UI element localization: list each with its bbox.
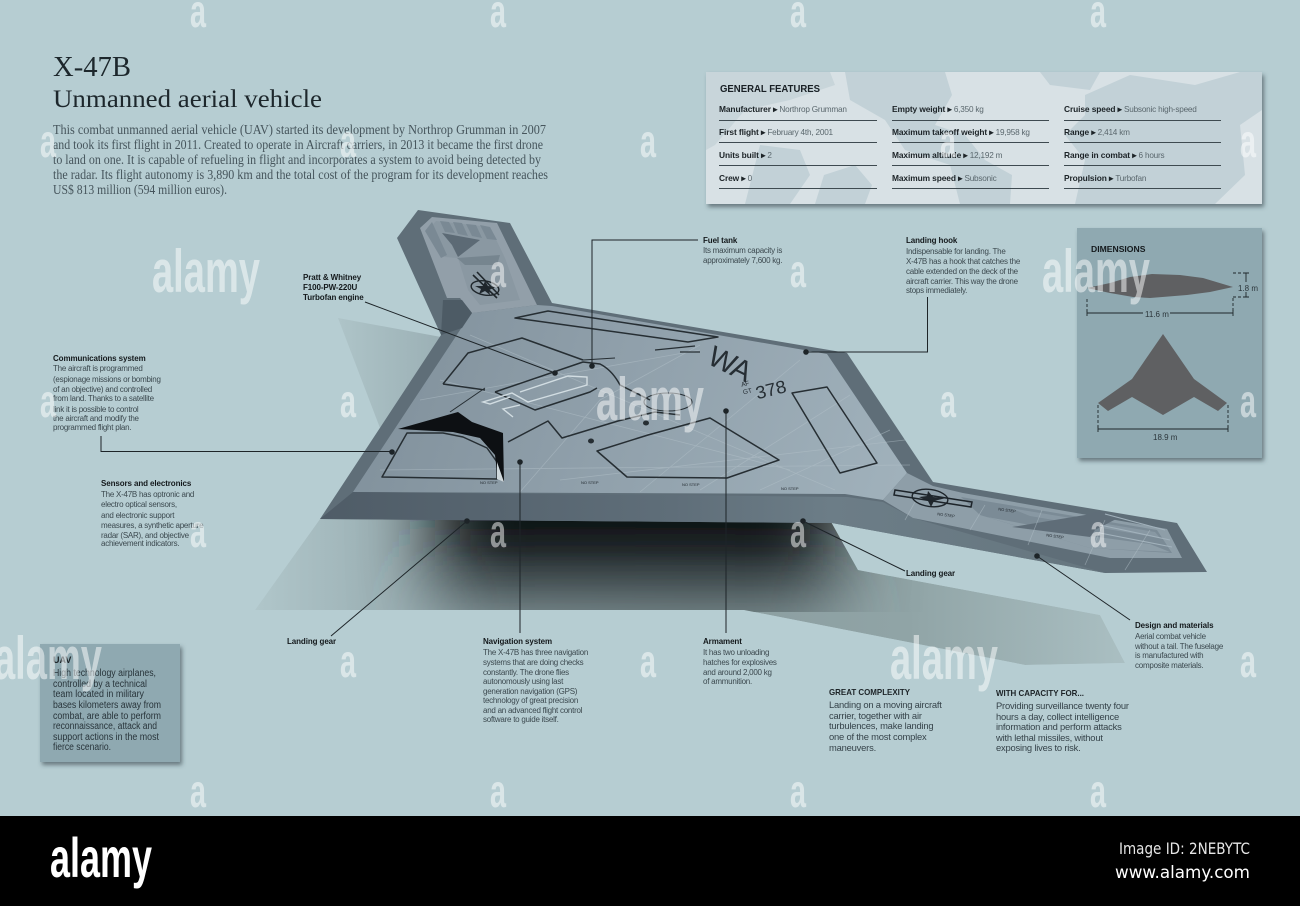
callout: communications system: The aircraft is programmed — [53, 364, 143, 373]
callout: communications system: from land. Thanks to a satellite — [53, 394, 155, 403]
aircraft upper surface — [353, 305, 907, 500]
features column 1: Manufacturer ▸ Northrop Grumman — [719, 104, 847, 114]
watermarks: a — [1240, 635, 1256, 687]
callout: communications system: Communications system — [53, 354, 146, 363]
watermarks: alamy — [152, 238, 260, 305]
dimension labels: 18.9 m — [1153, 433, 1178, 442]
leader: armament — [723, 408, 729, 633]
stencil NO STEP texts: NO STEP — [781, 486, 799, 491]
panel: UAV: High technology airplanes, — [53, 668, 156, 679]
callout: fuel tank: Its maximum capacity is — [703, 246, 782, 255]
callout: armament: Armament — [703, 637, 742, 646]
text block: great complexity: carrier, together with air — [829, 710, 922, 721]
leader: fuel tank — [589, 240, 698, 369]
intro text block: the radar. Its flight autonomy is 3,890 km and the total cost of the program for its development reaches — [53, 167, 548, 182]
callout: communications system: the aircraft and modify the — [53, 414, 140, 423]
panel: dimensions — [1077, 228, 1262, 458]
title — [53, 52, 322, 113]
stencil NO STEP texts: NO STEP — [581, 480, 599, 485]
text block: great complexity: one of the most complex — [829, 731, 927, 742]
callout: navigation system: generation navigation (GPS) — [483, 687, 578, 696]
watermarks: a — [40, 115, 56, 167]
watermarks: a — [490, 765, 506, 817]
callout: armament: of ammunition. — [703, 677, 752, 686]
text block: great complexity: turbulences, make landing — [829, 720, 933, 731]
front top silhouette — [1098, 334, 1227, 415]
panel: UAV: support actions in the most — [53, 732, 159, 743]
aircraft body outline — [320, 210, 1207, 573]
callout: engine: F100-PW-220U — [303, 283, 358, 292]
watermarks: a — [1090, 765, 1106, 817]
tail markings WA 378: GT — [742, 387, 753, 396]
callout: landing hook: Indispensable for landing. The — [906, 247, 1006, 256]
watermarks: a — [1240, 375, 1256, 427]
subtitle: Unmanned aerial vehicle — [53, 86, 322, 113]
callout: navigation system: Navigation system — [483, 637, 552, 646]
callout: landing hook: Landing hook — [906, 236, 958, 245]
watermarks: a — [790, 765, 806, 817]
callout: sensors and electronics: achievement indicators. — [101, 539, 179, 548]
watermarks: a — [940, 115, 956, 167]
callout: engine — [303, 273, 364, 302]
features column 3 — [1064, 104, 1221, 188]
dimension labels: 11.6 m — [1145, 310, 1169, 319]
intro text block: to land on one. It is capable of refueling in flight and incorporates a system to avoid being detected by — [53, 152, 541, 167]
callout: navigation system: constantly. The drone flies — [483, 668, 569, 677]
wing dark blob — [441, 300, 472, 335]
watermarks: a — [940, 375, 956, 427]
callout: fuel tank: Fuel tank — [703, 236, 738, 245]
callout: sensors and electronics: radar (SAR), and objective — [101, 531, 190, 540]
side view silhouette — [1087, 274, 1233, 298]
stencil NO STEP texts: NO STEP — [937, 511, 955, 519]
text block: with capacity for: exposing lives to risk. — [996, 742, 1080, 753]
watermarks: a — [1240, 115, 1256, 167]
callout: landing hook: cable extended on the deck of the — [906, 267, 1019, 276]
watermarks: alamy — [1042, 238, 1150, 305]
features column 2 — [892, 104, 1049, 188]
watermarks: a — [1090, 505, 1106, 557]
callout: communications system: of an objective) and controlled — [53, 385, 152, 394]
features column 1: First flight ▸ February 4th, 2001 — [719, 127, 834, 137]
leader: navigation system — [517, 459, 523, 633]
panel: UAV: bases kilometers away from — [53, 700, 161, 711]
callout: communications system: programmed flight plan. — [53, 423, 131, 432]
features column 3: Range ▸ 2,414 km — [1064, 127, 1130, 137]
callout: design and materials: is manufactured with — [1135, 651, 1203, 660]
callout: fuel tank: approximately 7,600 kg. — [703, 256, 782, 265]
roundel left wing — [470, 272, 500, 298]
panel: UAV: UAV — [53, 655, 71, 665]
callout: landing hook: stops immediately. — [906, 286, 967, 295]
watermarks: a — [790, 245, 806, 297]
stencil NO STEP texts: NO STEP — [1046, 532, 1064, 540]
panel: UAV: reconnaissance, attack and — [53, 721, 157, 732]
intro text block: US$ 813 million (594 million euros). — [53, 182, 227, 197]
callout: sensors and electronics — [101, 479, 204, 548]
text block: great complexity: GREAT COMPLEXITY — [829, 687, 910, 697]
callout: navigation system: and an advanced flight control — [483, 706, 583, 715]
callout: design and materials — [1134, 621, 1224, 670]
leader: landing gear right — [800, 518, 905, 571]
features column 3: Propulsion ▸ Turbofan — [1064, 173, 1147, 183]
callout: sensors and electronics: The X-47B has optronic and — [101, 490, 194, 499]
wing light frame — [420, 217, 537, 313]
dimension lines — [1087, 273, 1249, 432]
stencil NO STEP texts: NO STEP — [480, 480, 498, 485]
heading: dimensions: DIMENSIONS — [1091, 244, 1146, 254]
front edge band — [320, 492, 1105, 573]
callout: navigation system — [483, 637, 588, 724]
stencil NO STEP texts: NO STEP — [998, 506, 1016, 514]
watermarks: alamy — [596, 366, 704, 433]
text block: with capacity for: Providing surveillance twenty four — [996, 700, 1129, 711]
watermarks: alamy — [890, 625, 998, 692]
watermarks: a — [190, 505, 206, 557]
leader: communications system — [101, 436, 395, 455]
leader: engine — [365, 302, 558, 376]
footer bar — [0, 816, 1300, 906]
intro text block: and took its first flight in 2011. Created to operate in Aircraft carriers, in 2013 it became the first drone — [53, 137, 543, 152]
leader: design and materials — [1034, 553, 1130, 620]
aircraft shadow on water — [255, 318, 1125, 665]
intro text block — [53, 122, 548, 197]
callout: navigation system: technology of great precision — [483, 696, 578, 705]
dimension labels: 1.8 m — [1238, 284, 1258, 293]
features column 1: Crew ▸ 0 — [719, 173, 753, 183]
callout: landing hook: aircraft carrier. This way the drone — [906, 277, 1019, 286]
features column 2: Empty weight ▸ 6,350 kg — [892, 104, 984, 114]
wing dark triangle — [442, 233, 480, 257]
tail markings WA 378: 378 — [754, 376, 788, 403]
leader: landing hook — [803, 297, 928, 355]
panel: UAV: combat, are able to perform — [53, 711, 161, 722]
watermarks: a — [40, 375, 56, 427]
callout: engine: Turbofan engine — [303, 293, 364, 302]
tail markings WA 378: WA — [703, 341, 758, 389]
panel: UAV: fierce scenario. — [53, 742, 111, 753]
callout: armament: It has two unloading — [703, 648, 769, 657]
title line X-47B: X-47B — [53, 52, 131, 83]
features column 3: Cruise speed ▸ Subsonic high-speed — [1064, 104, 1197, 114]
callout: landing hook: X-47B has a hook that catches the — [906, 257, 1021, 266]
callout: navigation system: systems that are doing checks — [483, 658, 584, 667]
callout: armament: and around 2,000 kg — [703, 668, 772, 677]
text block: with capacity for — [995, 688, 1129, 753]
leader: landing gear left — [331, 518, 470, 636]
text block: great complexity: Landing on a moving aircraft — [829, 699, 942, 710]
text block: with capacity for: hours a day, collect intelligence — [996, 711, 1119, 722]
text block: with capacity for: with lethal missiles, without — [995, 732, 1103, 743]
watermarks: a — [490, 505, 506, 557]
panel: UAV: controlled by a technical — [53, 679, 147, 690]
panel: general features — [706, 72, 1262, 204]
left wing tail surfaces — [420, 217, 537, 335]
callout: armament: hatches for explosives — [703, 658, 777, 667]
callout: design and materials: Aerial combat vehicle — [1135, 632, 1207, 641]
roundel right wing — [894, 487, 972, 509]
callout: sensors and electronics: and electronic support — [101, 511, 175, 520]
features column 2: Maximum altitude ▸ 12,192 m — [892, 150, 1003, 160]
features column 1 — [719, 104, 877, 188]
callout: communications system: link it is possible to control — [53, 405, 139, 414]
callout: landing hook — [906, 236, 1021, 295]
dimension labels — [1145, 284, 1258, 442]
watermarks: a — [190, 765, 206, 817]
stencil NO STEP texts: NO STEP — [682, 482, 700, 487]
footer url: www.alamy.com — [1115, 863, 1250, 883]
aircraft X-47B — [320, 210, 1207, 573]
stencil NO STEP texts — [480, 480, 1064, 540]
heading: general features: GENERAL FEATURES — [720, 84, 820, 95]
features column 2: Maximum takeoff weight ▸ 19,958 kg — [892, 127, 1030, 137]
footer image id: Image ID: 2NEBYTC — [1119, 839, 1250, 858]
right wing upper surface — [883, 473, 1182, 558]
features column 2: Maximum speed ▸ Subsonic — [892, 173, 997, 183]
panel: UAV: team located in military — [53, 689, 144, 700]
watermarks: a — [490, 245, 506, 297]
callout: design and materials: without a tail. The fuselage — [1134, 642, 1224, 651]
callout: sensors and electronics: electro optical sensors, — [101, 500, 177, 509]
watermarks: a — [640, 115, 656, 167]
callout: fuel tank — [703, 236, 782, 265]
callout: design and materials: Design and materials — [1135, 621, 1214, 630]
text block: great complexity: maneuvers. — [829, 742, 876, 753]
callout: communications system: (espionage missions or bombing — [53, 375, 161, 384]
callout: sensors and electronics: measures, a synthetic aperture — [101, 521, 204, 530]
footer logo: alamy — [50, 826, 152, 889]
text block: with capacity for: WITH CAPACITY FOR... — [996, 688, 1084, 698]
callout: landing gear right: Landing gear — [906, 569, 955, 578]
white refuelling outline — [483, 376, 587, 417]
callout: armament — [703, 637, 777, 686]
watermarks: a — [340, 115, 356, 167]
tail markings WA 378: AF — [740, 380, 750, 389]
features column 1: Units built ▸ 2 — [719, 150, 772, 160]
panel: UAV — [40, 644, 180, 762]
seams — [380, 335, 1150, 570]
text block: great complexity — [829, 687, 942, 753]
callout: landing gear left: Landing gear — [287, 637, 336, 646]
wing stripes — [425, 221, 497, 258]
callout: navigation system: software to guide itself. — [483, 715, 559, 724]
callout: engine: Pratt & Whitney — [303, 273, 362, 282]
wing inner panel — [426, 221, 520, 305]
watermarks: a — [790, 505, 806, 557]
callout: navigation system: The X-47B has three navigation — [483, 648, 588, 657]
callout: navigation system: autonomously using last — [483, 677, 564, 686]
panel outlines — [382, 311, 877, 479]
tail markings WA 378 — [703, 341, 788, 403]
intake — [398, 412, 504, 482]
callout: sensors and electronics: Sensors and electronics — [101, 479, 192, 488]
callout: communications system — [53, 354, 161, 432]
features column 3: Range in combat ▸ 6 hours — [1064, 150, 1165, 160]
intro text block: This combat unmanned aerial vehicle (UAV) started its development by Northrop Grumman in 2007 — [53, 122, 546, 137]
watermarks: a — [340, 375, 356, 427]
watermarks: a — [340, 635, 356, 687]
text block: with capacity for: information and perform attacks — [996, 721, 1122, 732]
watermarks: a — [640, 635, 656, 687]
callout: design and materials: composite materials. — [1135, 661, 1203, 670]
